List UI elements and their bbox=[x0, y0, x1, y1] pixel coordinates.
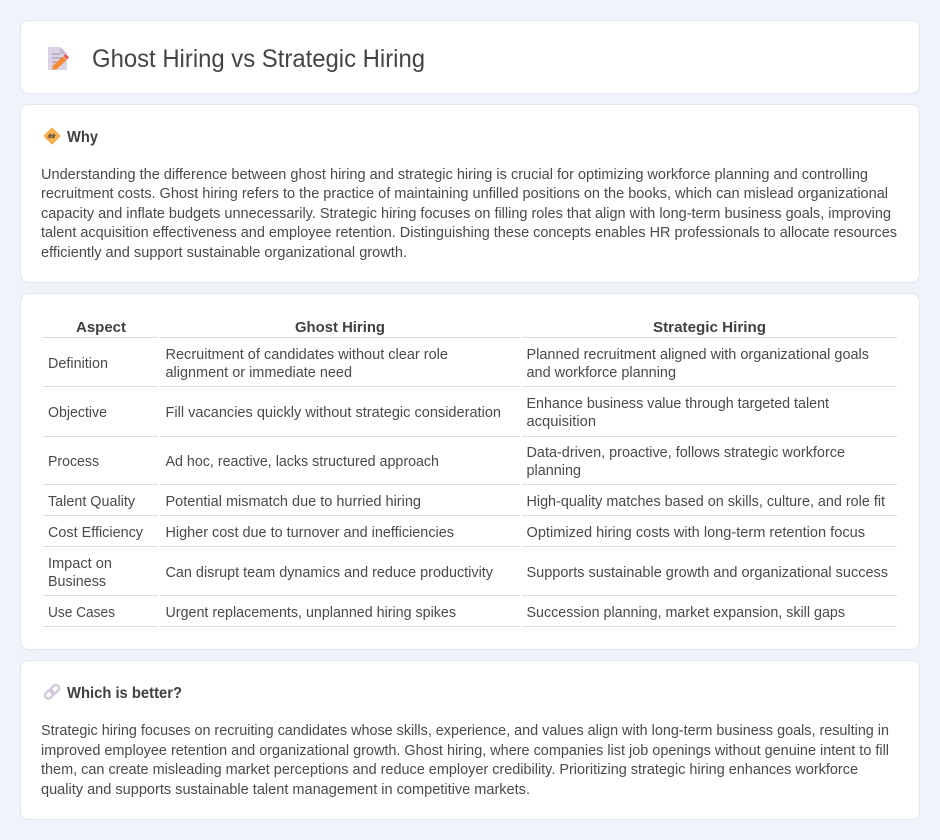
row: use cases bbox=[43, 605, 897, 627]
row: objective: Objective bbox=[48, 405, 107, 421]
panel: comparison table bbox=[20, 294, 920, 650]
text block: verdict: quality and supports sustainable talent management in competitive markets. bbox=[41, 782, 530, 798]
row: cost efficiency bbox=[43, 525, 897, 547]
row: talent quality: Potential mismatch due to hurried hiring bbox=[166, 494, 421, 510]
row: talent quality: Talent Quality bbox=[48, 494, 136, 510]
panel: which is better bbox=[20, 660, 920, 820]
row: impact on business: Business bbox=[48, 574, 106, 590]
row: definition: Planned recruitment aligned with organizational goals bbox=[526, 347, 869, 363]
row: cost efficiency: Cost Efficiency bbox=[48, 525, 144, 541]
table header row bbox=[43, 320, 897, 338]
row: process: Data-driven, proactive, follows strategic workforce bbox=[526, 445, 845, 461]
table header row: Strategic Hiring bbox=[653, 320, 766, 336]
row: objective: acquisition bbox=[526, 414, 596, 430]
row: impact on business: Supports sustainable growth and organizational success bbox=[526, 565, 888, 581]
row: definition: and workforce planning bbox=[526, 365, 676, 381]
row: definition: Recruitment of candidates without clear role bbox=[166, 347, 448, 363]
text block: verdict bbox=[41, 723, 889, 798]
table header row: Ghost Hiring bbox=[295, 320, 385, 336]
row: objective bbox=[43, 396, 897, 437]
text block: verdict: improved employee retention and organizational growth. Ghost hiring, where companies list job openings without genuine intent to fill bbox=[41, 743, 889, 759]
text block: why explanation: recruitment costs. Ghost hiring refers to the practice of maintaining unfilled positions on the books, which can mislead organizational bbox=[41, 186, 888, 202]
row: process bbox=[43, 445, 897, 485]
title: Ghost Hiring vs Strategic Hiring bbox=[92, 45, 425, 73]
row: definition: Definition bbox=[48, 356, 108, 372]
row: cost efficiency: Higher cost due to turnover and inefficiencies bbox=[166, 525, 454, 541]
row: objective: Fill vacancies quickly without strategic consideration bbox=[166, 405, 501, 421]
row: definition: alignment or immediate need bbox=[166, 365, 352, 381]
text block: why explanation: Understanding the difference between ghost hiring and strategic hiring is crucial for optimizing workforce planning and controlling bbox=[41, 167, 868, 183]
text block: verdict: Strategic hiring focuses on recruiting candidates whose skills, experience, and values align with long-term business goals, resulting in bbox=[41, 723, 889, 739]
icon: chain link bbox=[44, 684, 60, 700]
row: impact on business bbox=[43, 556, 897, 596]
table header row: Aspect bbox=[76, 320, 126, 336]
row: use cases: Use Cases bbox=[48, 605, 115, 621]
row: process: planning bbox=[526, 463, 581, 479]
text block: why explanation bbox=[41, 167, 897, 261]
row: process: Process bbox=[48, 454, 99, 470]
row: definition bbox=[43, 347, 897, 387]
row: process: Ad hoc, reactive, lacks structured approach bbox=[166, 454, 439, 470]
panel: why bbox=[20, 104, 920, 282]
row: use cases: Succession planning, market expansion, skill gaps bbox=[526, 605, 845, 621]
text block: why explanation: efficiently and support sustainable organizational growth. bbox=[41, 245, 407, 261]
icon: warning diamond bbox=[44, 128, 60, 144]
row: impact on business: Can disrupt team dynamics and reduce productivity bbox=[166, 565, 494, 581]
text block: why explanation: talent acquisition effectiveness and employee retention. Distinguishing these concepts enables HR professionals to allocate resources bbox=[41, 225, 897, 241]
row: use cases: Urgent replacements, unplanned hiring spikes bbox=[166, 605, 456, 621]
text block: verdict: them, can create misleading market perceptions and reduce employer credibility. Prioritizing strategic hiring enhances workforce bbox=[41, 762, 858, 778]
row: talent quality bbox=[43, 494, 897, 516]
row: impact on business: Impact on bbox=[48, 556, 112, 572]
text block: why explanation: capacity and inflate budgets unnecessarily. Strategic hiring focuses on filling roles that align with long-term business goals, improving bbox=[41, 206, 891, 222]
heading: which is better: Which is better? bbox=[67, 685, 182, 702]
icon: document with pencil bbox=[48, 47, 69, 70]
row: talent quality: High-quality matches based on skills, culture, and role fit bbox=[526, 494, 885, 510]
row: cost efficiency: Optimized hiring costs with long-term retention focus bbox=[526, 525, 865, 541]
panel: header bbox=[20, 20, 920, 94]
row: objective: Enhance business value through targeted talent bbox=[526, 396, 829, 412]
heading: why: Why bbox=[67, 129, 98, 146]
